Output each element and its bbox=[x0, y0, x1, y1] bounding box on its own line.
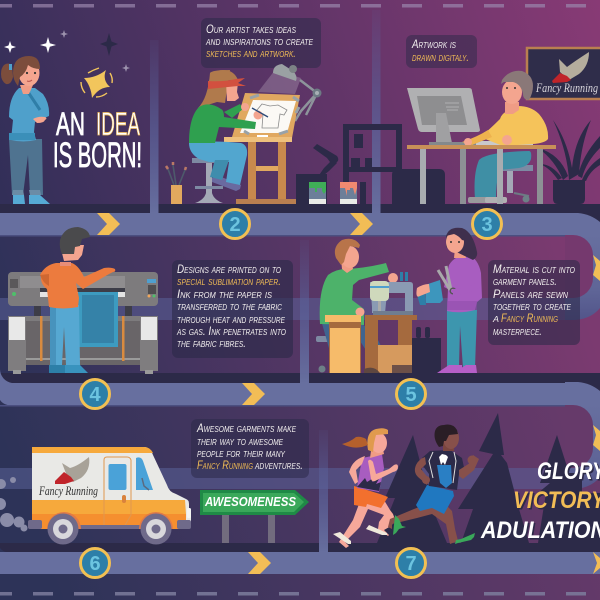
text panel: step 4: Designs are printed on to bbox=[177, 262, 281, 276]
text panel: step 2: sketches and artwork. bbox=[206, 46, 296, 60]
text panel: step 6 bbox=[191, 419, 309, 478]
text panel: step 3: Artwork is bbox=[411, 37, 457, 51]
victory text bbox=[480, 458, 600, 546]
text panel: step 4: transferred to the fabric bbox=[177, 299, 282, 313]
artist at drafting table bbox=[189, 64, 322, 204]
heading: an idea is born bbox=[53, 106, 142, 175]
badge 4: 4 bbox=[89, 384, 101, 406]
text panel: step 6: their way to awesome bbox=[197, 434, 284, 448]
text panel: step 4: the fabric fibres. bbox=[177, 336, 246, 350]
road chevrons bbox=[97, 213, 600, 574]
badge 6: 6 bbox=[89, 553, 101, 575]
text panel: step 6: Fancy Running bbox=[197, 458, 253, 472]
text panel: step 2: and inspirations to create bbox=[205, 34, 314, 48]
sewing scene bbox=[316, 239, 441, 373]
woman thinking bbox=[1, 56, 50, 204]
workshop silhouettes bbox=[296, 120, 600, 205]
text panel: step 2: Our artist takes ideas bbox=[206, 22, 297, 36]
text panel: step 5: together to create bbox=[493, 299, 572, 313]
text panel: step 5 bbox=[488, 260, 580, 345]
framed logo board bbox=[527, 48, 600, 99]
text panel: step 5: Material is cut into bbox=[493, 262, 575, 276]
text panel: step 3 bbox=[406, 35, 477, 68]
large format printer bbox=[8, 272, 158, 374]
awesomeness sign: AWESOMENESS bbox=[204, 494, 296, 509]
badge 7 bbox=[396, 548, 426, 578]
heading: an idea is born: IDEA bbox=[96, 106, 140, 142]
exhaust smoke bbox=[0, 477, 28, 532]
top dashes bbox=[0, 4, 586, 8]
woman with scissors and fabric bbox=[416, 228, 482, 373]
badge 6 bbox=[80, 548, 110, 578]
badge 5: 5 bbox=[405, 384, 417, 406]
van logo bbox=[38, 457, 98, 498]
text panel: step 4: through heat and pressure bbox=[177, 312, 286, 326]
heading: an idea is born: IS BORN! bbox=[53, 136, 142, 175]
road bbox=[0, 213, 600, 574]
digital artist at desk bbox=[407, 71, 556, 204]
text panel: step 4: as gas. Ink penetrates into bbox=[176, 324, 286, 338]
text panel: step 6: Awesome garments make bbox=[196, 421, 297, 435]
van logo: Fancy Running bbox=[38, 483, 98, 498]
badge 3: 3 bbox=[481, 214, 493, 236]
badge 2 bbox=[220, 210, 250, 238]
text panel: step 4 bbox=[172, 260, 293, 358]
text panel: step 5: masterpiece. bbox=[493, 324, 542, 338]
road u-turn right upper bbox=[565, 213, 600, 320]
pine tree silhouettes bbox=[377, 413, 600, 543]
text panel: step 5: Panels are sewn bbox=[493, 287, 568, 301]
text panel: step 4: special sublimation paper. bbox=[177, 274, 281, 288]
badge 3 bbox=[472, 210, 502, 238]
text panel: step 6: adventures. bbox=[254, 458, 303, 472]
text panel: step 5: a bbox=[492, 311, 499, 325]
printer operator bbox=[40, 227, 115, 373]
female runner bbox=[333, 428, 398, 548]
ground strips bbox=[0, 204, 600, 552]
awesomeness sign bbox=[200, 490, 309, 543]
badge 2: 2 bbox=[229, 214, 241, 236]
text panel: step 5: garment panels. bbox=[493, 274, 557, 288]
text panel: step 4: Ink from the paper is bbox=[177, 287, 273, 301]
vertical road connectors bbox=[150, 10, 380, 552]
road u-turn right lower bbox=[565, 382, 600, 489]
step badges bbox=[80, 210, 502, 578]
text panel: step 2 bbox=[201, 18, 321, 68]
heading: an idea is born: AN bbox=[56, 106, 85, 142]
badge 4 bbox=[80, 380, 110, 408]
paint cans bbox=[309, 182, 357, 204]
stars and sparkle bbox=[4, 30, 130, 98]
delivery van bbox=[28, 447, 191, 544]
badge 5 bbox=[396, 380, 426, 408]
badge 7: 7 bbox=[405, 553, 417, 575]
brush cup bbox=[166, 162, 186, 204]
text panel: step 5: Fancy Running bbox=[501, 311, 558, 325]
bottom dashes bbox=[0, 592, 586, 596]
male runner bbox=[388, 425, 479, 544]
text panel: step 6: people for their many bbox=[197, 446, 286, 460]
text panel: step 3: drawn digitaly. bbox=[412, 50, 469, 64]
